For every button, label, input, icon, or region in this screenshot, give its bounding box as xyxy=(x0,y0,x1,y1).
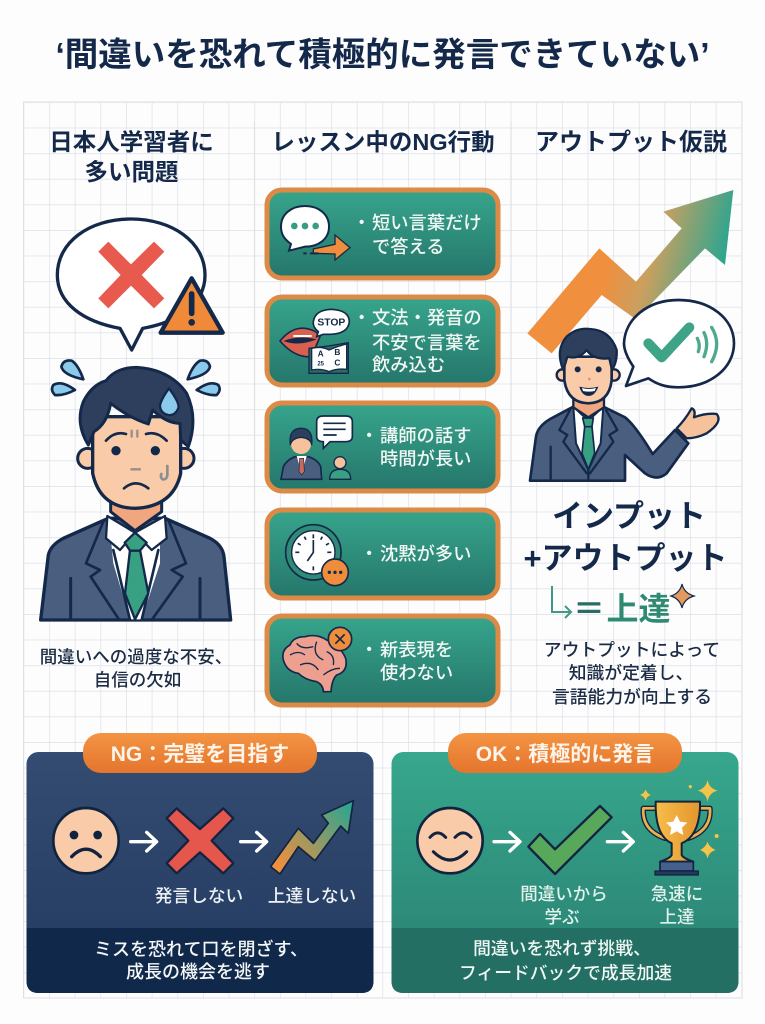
label: rapid improvement xyxy=(651,884,703,927)
panel: OK xyxy=(392,733,738,993)
caption: right column: アウトプットによって xyxy=(544,640,720,660)
caption: left column: 自信の欠如 xyxy=(94,670,181,690)
icon: faltering arrow xyxy=(271,801,353,874)
icon: lips, stop bubble and book xyxy=(280,309,349,373)
formula: equals improvement: 上達 xyxy=(606,591,671,627)
formula: equals improvement xyxy=(552,584,694,627)
illustration: worried businessman xyxy=(41,219,231,620)
icon: happy face xyxy=(417,808,483,873)
strip text: OK: 間違いを恐れず挑戦、 xyxy=(473,938,651,958)
card text: 沈黙が多い xyxy=(380,543,471,564)
pill heading: OK xyxy=(448,733,682,773)
icon: warning triangle xyxy=(161,278,223,333)
label: rapid improvement: 急速に xyxy=(651,884,703,904)
formula: input plus output: +アウトプット xyxy=(523,541,728,576)
card text: 不安で言葉を xyxy=(372,332,482,353)
card text xyxy=(360,639,453,683)
icon: red cross xyxy=(167,808,233,873)
head and face xyxy=(78,367,194,531)
card text: で答える xyxy=(372,236,445,257)
card text: 文法・発音の xyxy=(372,307,482,328)
card text: ・ xyxy=(352,212,371,233)
card text xyxy=(360,425,471,469)
flow icons: OK xyxy=(417,780,719,875)
card: no new expressions xyxy=(267,616,498,705)
card text: ・ xyxy=(352,307,371,328)
card text: ・ xyxy=(360,425,378,446)
heading: left column: 日本人学習者に xyxy=(49,129,214,155)
card: long silence xyxy=(267,510,498,598)
card text xyxy=(352,212,482,257)
strip text: NG xyxy=(94,938,308,982)
icon: lips, stop bubble and book: STOP xyxy=(317,317,346,328)
title: ‘間違いを恐れて積極的に発言できていない’ xyxy=(55,37,710,74)
icon: lips, stop bubble and book: C xyxy=(334,357,340,367)
sweat drops xyxy=(52,360,220,395)
card text: 時間が長い xyxy=(380,448,471,469)
icon: lips, stop bubble and book: 25 xyxy=(317,361,325,367)
formula: equals improvement: ＝ xyxy=(573,591,605,627)
caption: right column xyxy=(544,640,720,707)
caption: right column: 知識が定着し、 xyxy=(569,662,693,683)
card text: 短い言葉だけ xyxy=(372,212,482,233)
label: learn from mistakes: 学ぶ xyxy=(544,907,580,927)
label: learn from mistakes: 間違いから xyxy=(520,884,608,904)
label: learn from mistakes xyxy=(520,884,608,927)
card text: 新表現を xyxy=(380,639,453,660)
icon: teacher and student xyxy=(281,416,352,479)
heading: left column: 多い問題 xyxy=(84,159,178,185)
caption: left column xyxy=(40,647,232,690)
illustration: confident businessman with rising arrow xyxy=(527,190,734,481)
strip text: NG: ミスを恐れて口を閉ざす、 xyxy=(94,938,308,960)
sparkles xyxy=(640,780,719,858)
arrow xyxy=(494,832,520,851)
formula: input plus output: インプット xyxy=(552,499,706,534)
icon: lips, stop bubble and book: B xyxy=(334,347,340,357)
strip text: OK xyxy=(459,938,672,983)
pill heading: NG: NG：完璧を目指す xyxy=(111,743,289,766)
head and face xyxy=(557,329,620,417)
icon: sad face xyxy=(53,808,119,873)
card: teacher talks long xyxy=(267,403,498,491)
icon: green check xyxy=(528,806,612,874)
rising arrow xyxy=(527,190,733,353)
arrow xyxy=(607,832,633,851)
flow icons: NG xyxy=(53,801,353,874)
card text: 使わない xyxy=(380,662,453,683)
icon: brain with cross xyxy=(283,627,352,692)
arrow xyxy=(241,832,267,851)
card text: 講師の話す xyxy=(380,425,471,446)
icon: speech bubble with arrow xyxy=(281,206,350,260)
card text xyxy=(352,307,482,375)
heading: middle column: レッスン中のNG行動 xyxy=(271,129,495,155)
heading: left column xyxy=(49,129,214,185)
label: rapid improvement: 上達 xyxy=(660,907,694,927)
card text: ・ xyxy=(360,639,378,660)
card: short answers xyxy=(267,190,498,278)
label: does not speak: 発言しない xyxy=(155,886,243,906)
icon: lips, stop bubble and book: A xyxy=(318,349,324,359)
body in suit xyxy=(41,516,231,620)
caption: right column: 言語能力が向上する xyxy=(552,686,712,707)
heading: right column: アウトプット仮説 xyxy=(535,129,727,156)
body in suit with open hand xyxy=(530,407,719,481)
caption: left column: 間違いへの過度な不安、 xyxy=(40,647,232,667)
speech bubble with check and sound waves xyxy=(624,300,734,387)
pill heading: OK: OK：積極的に発言 xyxy=(476,743,654,766)
pill heading: NG xyxy=(83,733,317,773)
formula: input plus output xyxy=(523,499,728,576)
label: does not improve: 上達しない xyxy=(268,886,356,906)
strip text: OK: フィードバックで成長加速 xyxy=(459,963,672,983)
strip text: NG: 成長の機会を逃す xyxy=(126,962,270,982)
card text: ・ xyxy=(360,543,378,564)
speech bubble with red cross xyxy=(57,219,205,350)
card: swallowing words xyxy=(267,297,498,385)
card text: 飲み込む xyxy=(372,354,445,375)
arrow xyxy=(131,832,157,851)
icon: trophy xyxy=(643,802,710,875)
panel: NG xyxy=(26,733,374,993)
icon: clock with dots xyxy=(286,525,348,586)
